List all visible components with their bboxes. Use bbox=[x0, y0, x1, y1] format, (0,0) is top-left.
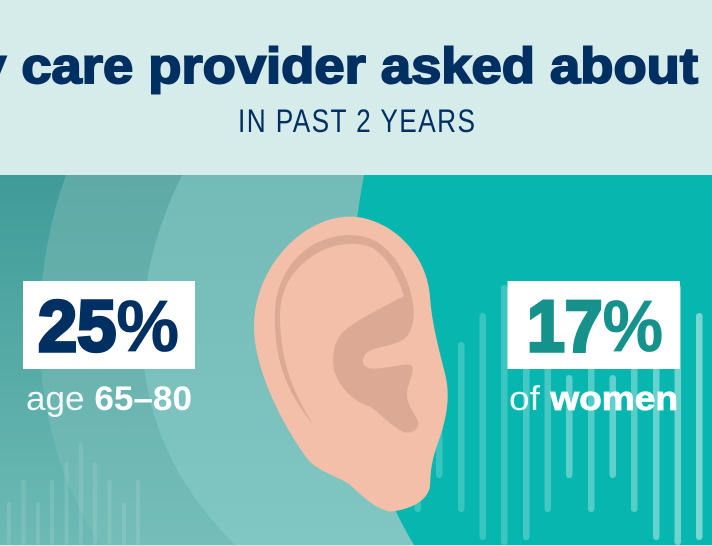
sound bars: right bbox=[414, 285, 702, 545]
stat box bbox=[508, 281, 680, 369]
sound bars: left bbox=[7, 443, 140, 545]
stat label: of women bbox=[509, 380, 678, 418]
icon: ear bbox=[254, 217, 448, 512]
stat label: age 65–80 bbox=[26, 380, 192, 418]
subtitle: IN PAST 2 YEARS bbox=[238, 105, 475, 140]
header panel bbox=[0, 0, 712, 175]
inner ear shading bbox=[275, 235, 418, 433]
ear outline bbox=[254, 217, 448, 512]
panel: teal background with sound-wave bands bbox=[0, 175, 712, 545]
stat value: 25% bbox=[38, 287, 179, 367]
stat: 25% age 65–80 bbox=[23, 281, 195, 418]
stat value: 17% bbox=[527, 287, 663, 367]
stat box bbox=[23, 281, 195, 369]
stat: 17% of women bbox=[508, 281, 680, 418]
